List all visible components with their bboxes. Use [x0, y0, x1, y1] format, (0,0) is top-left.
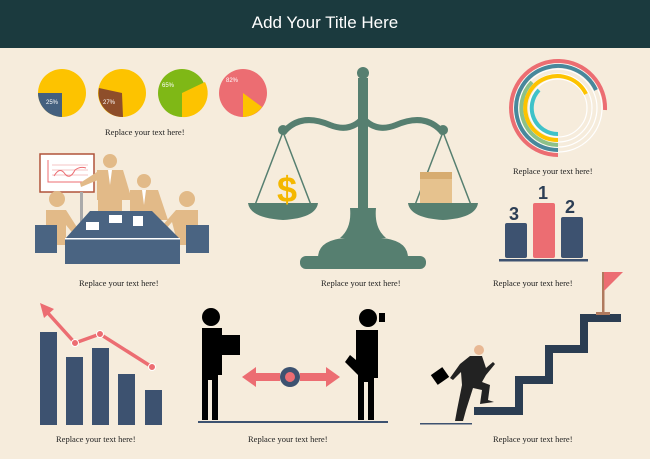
- pie charts: 65%: [162, 83, 175, 89]
- icon: box: [420, 172, 452, 203]
- text: Replace your text here!: [321, 278, 401, 288]
- title bar: Add Your Title Here: [252, 13, 398, 32]
- scale: [248, 67, 478, 269]
- podium: 2: [565, 197, 575, 217]
- pie charts: 82%: [226, 78, 239, 84]
- podium: 3: [509, 204, 519, 224]
- pie charts: 25%: [46, 100, 59, 106]
- podium: 1: [538, 183, 548, 203]
- title bar: [0, 0, 650, 48]
- concentric arcs: [511, 61, 605, 155]
- meeting illustration: [35, 154, 209, 264]
- icon: dollar: $: [277, 169, 297, 210]
- podium: [499, 183, 588, 262]
- text: Replace your text here!: [248, 434, 328, 444]
- captions: Replace your text here!: [105, 127, 185, 137]
- text: Replace your text here!: [79, 278, 159, 288]
- bar chart with trend line: [40, 303, 162, 425]
- text: Replace your text here!: [513, 166, 593, 176]
- two people with arrows: [198, 308, 388, 423]
- text: Replace your text here!: [493, 434, 573, 444]
- pie charts: 27%: [103, 100, 116, 106]
- pie charts: [38, 69, 267, 117]
- stairs with flag and runner: [420, 272, 623, 424]
- text: Replace your text here!: [493, 278, 573, 288]
- text: Replace your text here!: [56, 434, 136, 444]
